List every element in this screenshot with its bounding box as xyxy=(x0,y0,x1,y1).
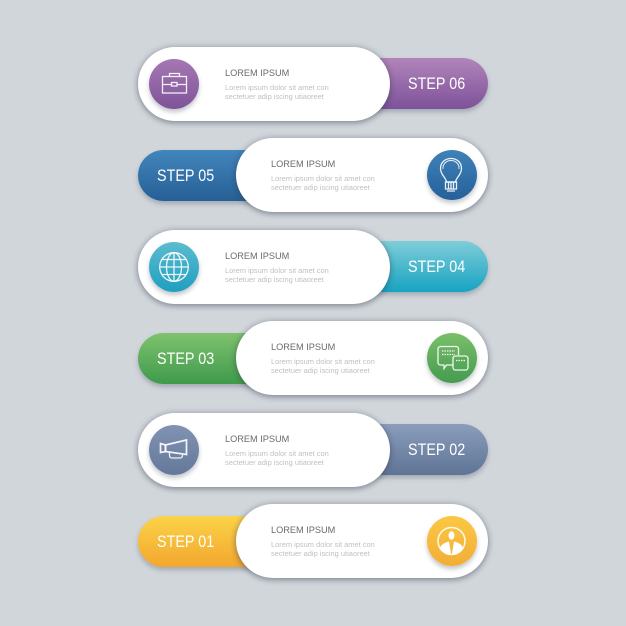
step 03 row xyxy=(136,318,492,401)
step 01 row xyxy=(136,500,492,584)
icon: light bulb xyxy=(426,150,476,200)
step 06 row xyxy=(134,44,490,127)
label: step 02: STEP 02 xyxy=(408,441,465,459)
heading: step 01: LOREM IPSUM xyxy=(271,525,335,535)
text: step 05: Lorem ipsum dolor sit amet con xyxy=(271,174,375,183)
heading: step 04: LOREM IPSUM xyxy=(225,250,289,260)
step 02 row xyxy=(134,410,490,493)
panel: step 04 card xyxy=(138,230,390,304)
text: step 06 xyxy=(225,83,329,101)
label: step 06: STEP 06 xyxy=(408,75,465,93)
panel: step 01 card xyxy=(236,504,488,578)
text: step 04: sectetuer adip iscing utiaoreet xyxy=(225,275,324,284)
panel: step 06 card xyxy=(138,47,390,121)
label: step 04: STEP 04 xyxy=(408,258,465,276)
heading: step 06: LOREM IPSUM xyxy=(225,68,289,78)
text: step 02 xyxy=(225,449,329,467)
text: step 03: sectetuer adip iscing utiaoreet xyxy=(271,366,370,375)
text: step 06: Lorem ipsum dolor sit amet con xyxy=(225,83,329,92)
text: step 02: sectetuer adip iscing utiaoreet xyxy=(225,458,324,467)
text: step 02: Lorem ipsum dolor sit amet con xyxy=(225,449,329,458)
heading: step 05: LOREM IPSUM xyxy=(271,159,335,169)
text: step 04: Lorem ipsum dolor sit amet con xyxy=(225,266,329,275)
icon: briefcase xyxy=(149,59,199,109)
tab: step 03 xyxy=(138,333,278,384)
label: step 05: STEP 05 xyxy=(157,167,214,185)
text: step 01: sectetuer adip iscing utiaoreet xyxy=(271,549,370,558)
panel: step 02 card xyxy=(138,413,390,487)
text: step 05 xyxy=(271,174,375,192)
step 04 row xyxy=(134,226,490,310)
icon: chat bubbles xyxy=(426,333,476,383)
text: step 03: Lorem ipsum dolor sit amet con xyxy=(271,357,375,366)
text: step 01 xyxy=(271,540,375,558)
tab: step 02 xyxy=(348,424,488,475)
icon: person in circle xyxy=(426,516,476,566)
text: step 03 xyxy=(271,357,375,375)
heading: step 03: LOREM IPSUM xyxy=(271,342,335,352)
panel: step 05 card xyxy=(236,138,488,212)
label: step 01: STEP 01 xyxy=(157,533,214,551)
icon: globe xyxy=(149,242,199,292)
tab: step 05 xyxy=(138,150,278,201)
icon: megaphone xyxy=(149,425,199,475)
text: step 05: sectetuer adip iscing utiaoreet xyxy=(271,183,370,192)
text: step 04 xyxy=(225,266,329,284)
text: step 06: sectetuer adip iscing utiaoreet xyxy=(225,92,324,101)
tab: step 06 xyxy=(348,58,488,109)
text: step 01: Lorem ipsum dolor sit amet con xyxy=(271,540,375,549)
step 05 row xyxy=(136,134,492,218)
label: step 03: STEP 03 xyxy=(157,350,214,368)
tab: step 04 xyxy=(348,241,488,292)
panel: step 03 card xyxy=(236,321,488,395)
heading: step 02: LOREM IPSUM xyxy=(225,434,289,444)
tab: step 01 xyxy=(138,516,278,567)
